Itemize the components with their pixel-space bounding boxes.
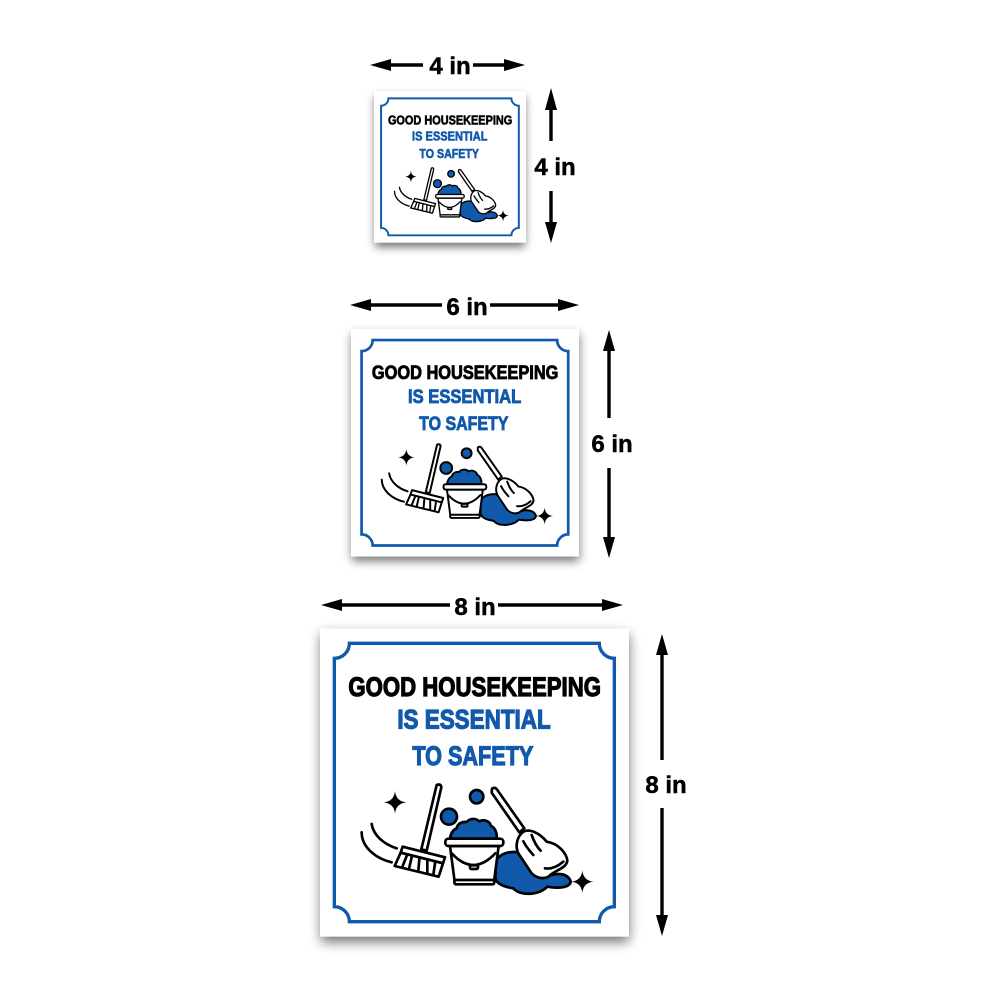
dimension: 8 in height: 8 in [645, 772, 687, 799]
sign: 6 in: TO SAFETY [419, 413, 508, 435]
dimension: 4 in height [534, 88, 576, 243]
sign: 6 in [351, 329, 579, 561]
dimension: 6 in height: 6 in [591, 431, 633, 458]
sign: 6 in: IS ESSENTIAL [408, 386, 521, 408]
dimension: 8 in width: 8 in [454, 594, 496, 621]
dimension: 4 in width: 4 in [429, 53, 471, 80]
sign: 4 in: GOOD HOUSEKEEPING [388, 112, 512, 127]
dimension: 6 in width: 6 in [446, 294, 488, 321]
dimension: 4 in width [370, 53, 525, 80]
sign: 8 in: GOOD HOUSEKEEPING [348, 672, 601, 702]
dimension: 6 in height [591, 330, 633, 558]
sign: 4 in [374, 91, 526, 247]
dimension: 8 in width [321, 594, 623, 621]
sign: 4 in: TO SAFETY [419, 146, 479, 161]
sign: 6 in: GOOD HOUSEKEEPING [372, 362, 558, 384]
sign: 8 in: IS ESSENTIAL [397, 705, 551, 735]
sign: 8 in [320, 628, 629, 942]
sign: 4 in: IS ESSENTIAL [412, 128, 487, 143]
sign: 8 in: TO SAFETY [412, 741, 533, 771]
dimension: 6 in width [350, 294, 579, 321]
dimension: 8 in height [645, 634, 687, 936]
dimension: 4 in height: 4 in [534, 154, 576, 181]
